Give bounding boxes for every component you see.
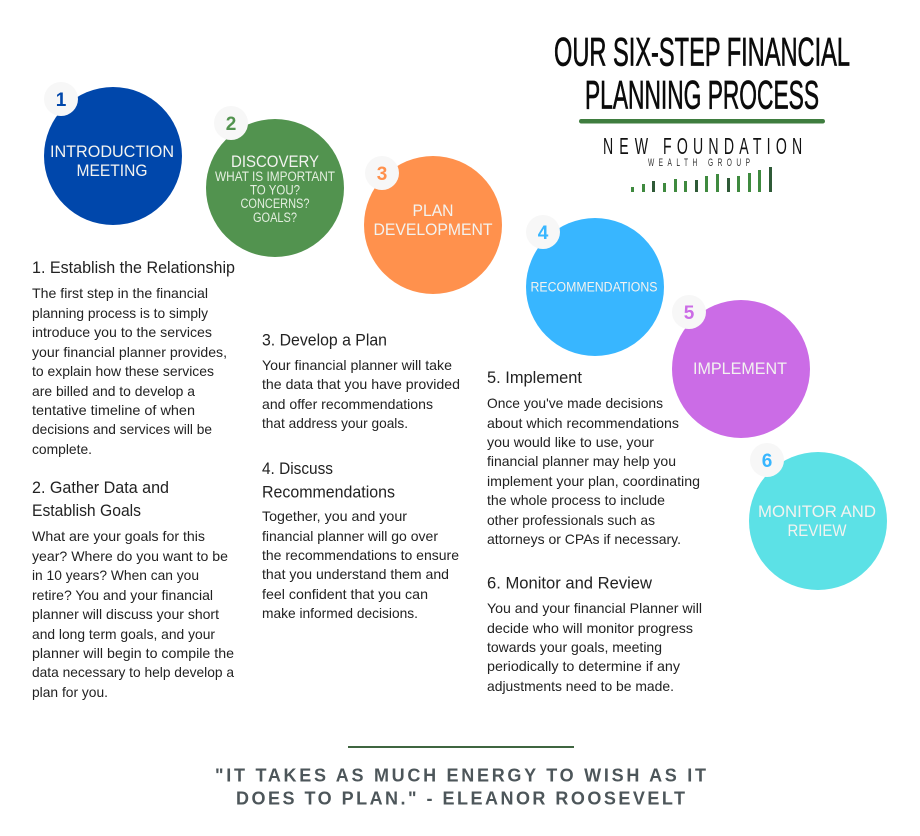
text block: 5. Implement: the whole process to include (487, 493, 665, 508)
logo: New Foundation Wealth Group: FOUNDATION (663, 133, 802, 160)
text block: 1. Establish the Relationship: tentative timeline of when (32, 403, 195, 418)
logo: New Foundation Wealth Group (603, 133, 802, 192)
text block: 5. Implement: other professionals such as (487, 513, 655, 528)
text block: 2. Gather Data and Establish Goals: year? Where do you want to be (32, 549, 228, 564)
title underline (579, 119, 825, 124)
text block: 3. Develop a Plan: and offer recommendations (262, 397, 433, 412)
step 3 circle: PLAN (412, 201, 454, 220)
step 4 circle (526, 215, 664, 356)
text block: 6. Monitor and Review: 6. Monitor and Review (487, 574, 652, 592)
text block: 4. Discuss Recommendations: feel confident that you can (262, 587, 428, 602)
step 2 circle: 2 (226, 114, 236, 135)
text block: 6. Monitor and Review: adjustments need to be made. (487, 679, 674, 694)
text block: 6. Monitor and Review: You and your financial Planner will (487, 601, 702, 616)
quote: "IT TAKES AS MUCH ENERGY TO WISH AS IT (215, 766, 706, 786)
step 3 circle: DEVELOPMENT (374, 220, 492, 239)
text block: 1. Establish the Relationship: The first step in the financial (32, 286, 208, 301)
text block: 3. Develop a Plan: the data that you have provided (262, 377, 460, 392)
text block: 4. Discuss Recommendations: Together, you and your (262, 509, 407, 524)
text block: 2. Gather Data and Establish Goals: retire? You and your financial (32, 588, 213, 603)
text block: 2. Gather Data and Establish Goals: and long term goals, and your (32, 627, 215, 642)
text block: 4. Discuss Recommendations: Recommendations (262, 484, 395, 502)
step 5 circle: IMPLEMENT (693, 359, 787, 378)
step 2 circle: TO YOU? (250, 182, 300, 198)
text block: 2. Gather Data and Establish Goals: What are your goals for this (32, 529, 205, 544)
text block: 3. Develop a Plan: that address your goals. (262, 416, 408, 431)
text block: 4. Discuss Recommendations: financial planner will go over (262, 529, 438, 544)
text block: 2. Gather Data and Establish Goals: data necessary to help develop a (32, 665, 234, 680)
step 3 circle: 3 (377, 164, 387, 185)
text block: 2. Gather Data and Establish Goals: planner will discuss your short (32, 607, 219, 622)
title (554, 30, 850, 118)
text block: 2. Gather Data and Establish Goals (32, 479, 234, 700)
text block: 3. Develop a Plan: 3. Develop a Plan (262, 332, 387, 350)
step 1 circle: 1 (56, 90, 67, 111)
logo: New Foundation Wealth Group: NEW (603, 133, 649, 160)
text block: 2. Gather Data and Establish Goals: 2. Gather Data and (32, 479, 169, 497)
step 5 circle: 5 (684, 303, 695, 324)
text block: 2. Gather Data and Establish Goals: plan for you. (32, 685, 108, 700)
text block: 2. Gather Data and Establish Goals: planner will begin to compile the (32, 646, 234, 661)
step 2 circle (206, 106, 344, 257)
step 6 circle (749, 443, 887, 590)
text block: 3. Develop a Plan: Your financial planner will take (262, 358, 452, 373)
text block: 3. Develop a Plan (262, 332, 460, 431)
step 4 circle: RECOMMENDATIONS (530, 280, 658, 294)
logo bars (631, 167, 772, 192)
text block: 5. Implement: 5. Implement (487, 369, 582, 387)
text block: 5. Implement (487, 369, 700, 547)
text block: 4. Discuss Recommendations: 4. Discuss (262, 460, 333, 478)
text block: 1. Establish the Relationship: introduce you to the services (32, 325, 212, 340)
text block: 4. Discuss Recommendations: the recommendations to ensure (262, 548, 459, 563)
step 6 circle: REVIEW (788, 521, 846, 540)
step 2 circle: CONCERNS? (240, 196, 310, 211)
step 2 circle: WHAT IS IMPORTANT (215, 169, 335, 184)
text block: 1. Establish the Relationship: complete. (32, 442, 92, 457)
text block: 1. Establish the Relationship: decisions and services will be (32, 422, 212, 437)
step 1 circle: INTRODUCTION (50, 142, 174, 161)
text block: 6. Monitor and Review: decide who will monitor progress (487, 621, 693, 636)
text block: 4. Discuss Recommendations: make informed decisions. (262, 606, 418, 621)
text block: 5. Implement: Once you've made decisions (487, 396, 663, 411)
text block: 2. Gather Data and Establish Goals: in 10 years? When can you (32, 568, 199, 583)
step 2 circle: GOALS? (253, 210, 297, 225)
logo: New Foundation Wealth Group: WEALTH GROUP (648, 156, 750, 168)
text block: 6. Monitor and Review: periodically to determine if any (487, 659, 680, 674)
text block: 4. Discuss Recommendations (262, 460, 459, 621)
step 5 circle (672, 295, 810, 438)
text block: 5. Implement: financial planner may help you (487, 454, 676, 469)
quote: DOES TO PLAN." - ELEANOR ROOSEVELT (236, 788, 685, 808)
text block: 1. Establish the Relationship: planning process is to simply (32, 306, 208, 321)
step 4 circle: 4 (538, 223, 549, 244)
step 6 circle: 6 (762, 451, 772, 472)
text block: 1. Establish the Relationship: your financial planner provides, (32, 345, 227, 360)
step 1 circle: MEETING (76, 161, 148, 180)
step 1 circle (44, 82, 182, 225)
text block: 2. Gather Data and Establish Goals: Establish Goals (32, 502, 141, 520)
step 2 circle: DISCOVERY (231, 152, 319, 171)
text block: 5. Implement: implement your plan, coordinating (487, 474, 700, 489)
text block: 5. Implement: about which recommendations (487, 416, 679, 431)
text block: 1. Establish the Relationship: to explain how these services (32, 364, 214, 379)
text block: 4. Discuss Recommendations: that you understand them and (262, 567, 449, 582)
text block: 1. Establish the Relationship (32, 259, 235, 457)
text block: 1. Establish the Relationship: are billed and to develop a (32, 384, 195, 399)
text block: 1. Establish the Relationship: 1. Establish the Relationship (32, 259, 235, 277)
text block: 5. Implement: you would like to use, your (487, 435, 654, 450)
step 6 circle: MONITOR AND (758, 502, 876, 521)
quote (215, 766, 706, 808)
step 3 circle (364, 156, 502, 294)
text block: 5. Implement: attorneys or CPAs if necessary. (487, 532, 681, 547)
text block: 6. Monitor and Review (487, 574, 702, 694)
text block: 6. Monitor and Review: towards your goals, meeting (487, 640, 662, 655)
